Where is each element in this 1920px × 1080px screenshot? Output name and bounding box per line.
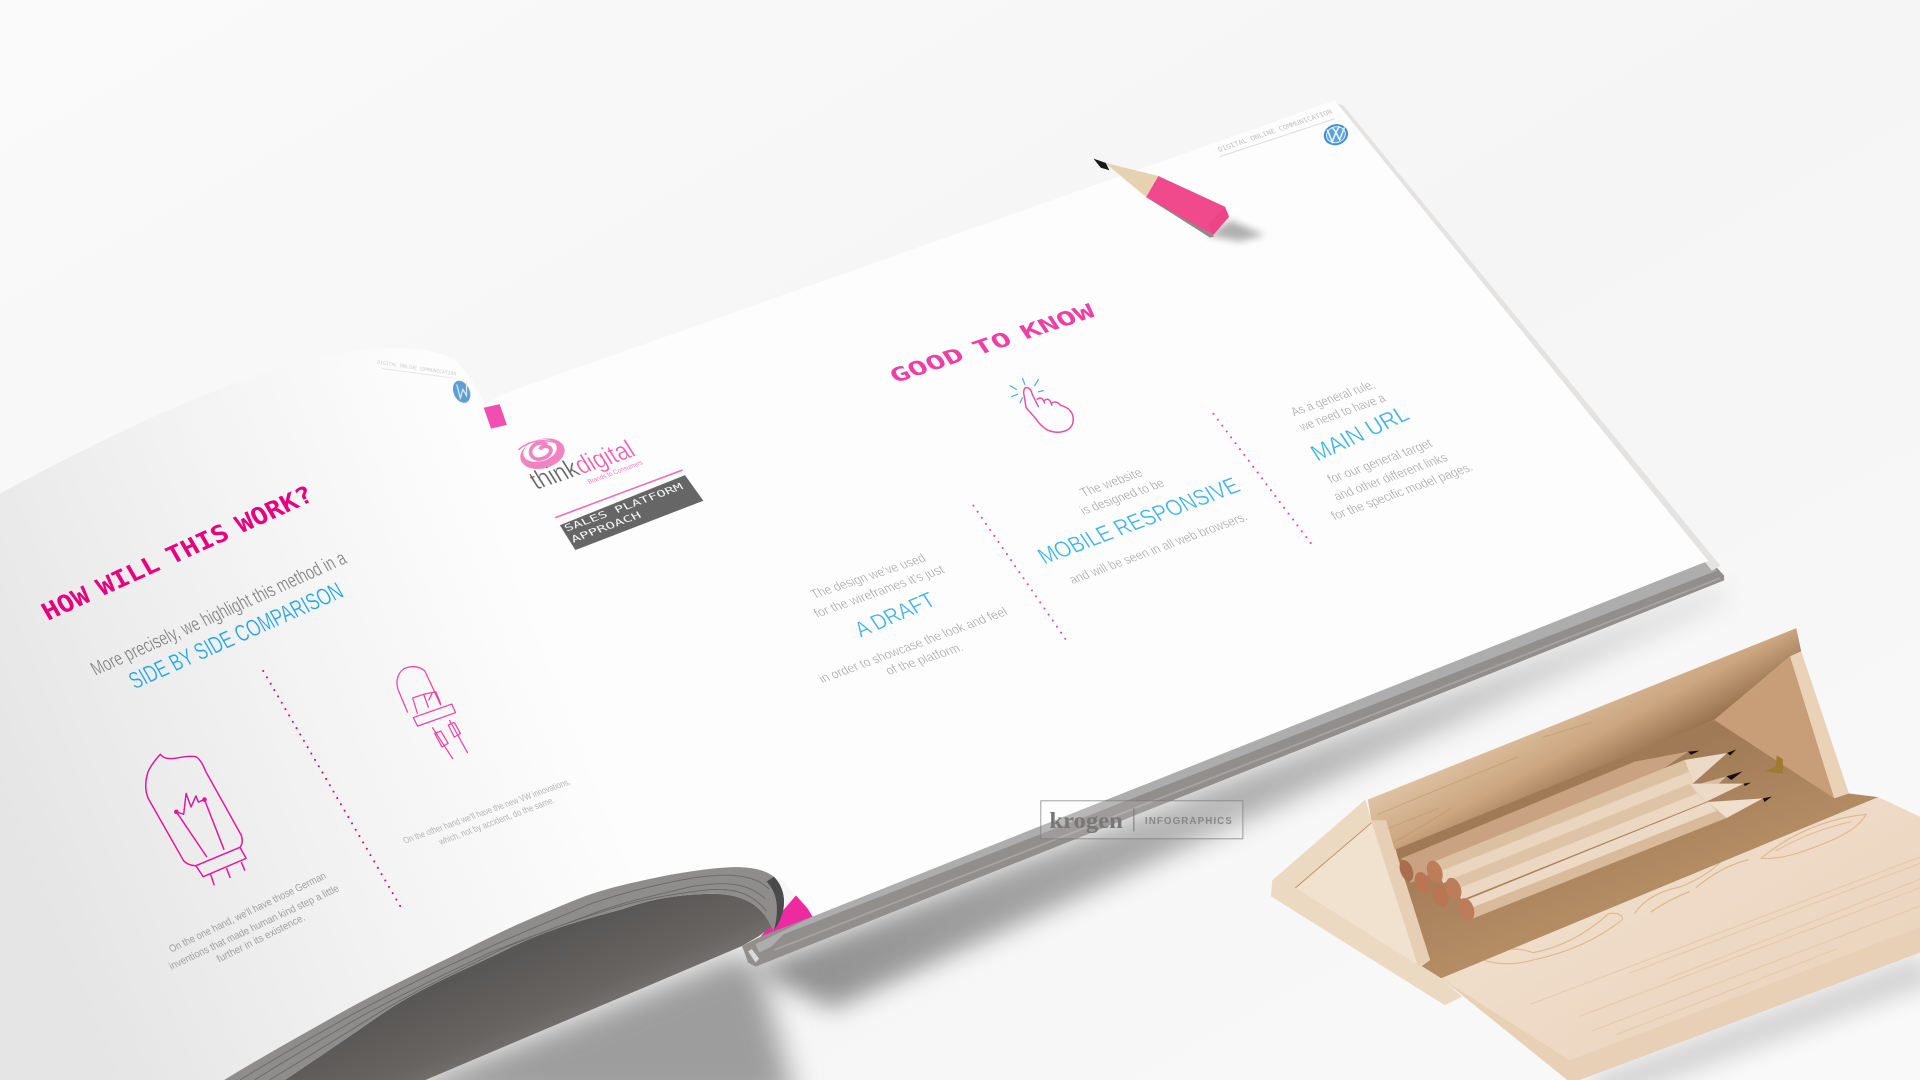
book underside xyxy=(285,894,771,1080)
text block: main url: for our general target xyxy=(1325,437,1435,487)
page header: digital online communication: DIGITAL ONLINE COMMUNICATION xyxy=(377,360,457,377)
text block: main url: for the specific model pages. xyxy=(1329,461,1476,523)
pencil xyxy=(1093,159,1265,241)
text block: mobile responsive: MOBILE RESPONSIVE xyxy=(1032,472,1245,569)
watermark: krogen infographics: krogen xyxy=(1049,808,1123,834)
box right triangle xyxy=(1714,651,1849,798)
box left end xyxy=(1271,800,1462,1005)
text block: a draft: A DRAFT xyxy=(850,588,940,642)
pink bookmark, top xyxy=(484,404,507,429)
text block: main url: and other different links xyxy=(1331,451,1451,504)
watermark: krogen infographics xyxy=(1041,801,1243,839)
text block: mobile responsive: The website xyxy=(1078,466,1146,500)
box lid xyxy=(1441,797,1920,1080)
icon: tapping hand xyxy=(1010,378,1073,432)
divider: dotted line xyxy=(263,671,402,909)
caption: one hand: further in its existence. xyxy=(215,912,307,965)
text block: a draft xyxy=(808,552,1010,686)
title box: sales platform approach: SALES PLATFORM xyxy=(562,481,685,534)
text block: mobile responsive: and will be seen in all web browsers. xyxy=(1067,510,1251,587)
caption: other hand: which, not by accident, do the same. xyxy=(436,796,557,848)
logo: think digital: thinkdigital xyxy=(524,436,640,495)
watermark: krogen infographics: INFOGRAPHICS xyxy=(1145,816,1232,827)
divider: right dotted line xyxy=(1213,414,1314,547)
left page xyxy=(0,348,767,1080)
heading: how will this work: HOW WILL THIS WORK? xyxy=(37,481,319,627)
box back wall xyxy=(1368,628,1801,850)
right page xyxy=(485,100,1720,916)
caption: one hand: On the one hand, we'll have those German xyxy=(167,871,328,955)
text block: main url: we need to have a xyxy=(1296,392,1389,434)
title box: sales platform approach: APPROACH xyxy=(569,510,644,545)
text block: main url: As a general rule, xyxy=(1288,378,1378,419)
intro sentence: More precisely, we highlight this method in a xyxy=(87,548,350,680)
text block: a draft: The design we've used xyxy=(808,552,929,602)
page header: digital online communication xyxy=(377,360,457,378)
book cover spine band xyxy=(742,558,1724,967)
divider: left dotted line xyxy=(973,506,1069,644)
text block: main url xyxy=(1288,378,1476,523)
text block: mobile responsive: is designed to be xyxy=(1078,477,1168,518)
caption: other hand xyxy=(402,777,573,848)
icon: VW logo xyxy=(1321,121,1350,148)
text block: mobile responsive xyxy=(1032,466,1251,587)
pink rule above title box xyxy=(553,470,683,518)
icon: vacuum tube bulb xyxy=(146,754,246,885)
icon: LED xyxy=(397,667,468,759)
heading: good to know: GOOD TO KNOW xyxy=(885,300,1101,388)
book cover shadow xyxy=(404,585,1729,1080)
text block: a draft: for the wireframes it's just xyxy=(811,563,947,621)
wooden pencil box xyxy=(1271,628,1920,1080)
caption: one hand: inventions that made human kind step a little xyxy=(167,883,341,972)
title box: sales platform approach xyxy=(557,475,703,551)
page block xyxy=(224,867,784,1080)
icon: VW logo xyxy=(450,378,474,406)
text block: a draft: in order to showcase the look and feel xyxy=(816,605,1010,686)
pink bookmark, bottom xyxy=(760,893,812,937)
box floor xyxy=(1395,720,1878,978)
highlight: side by side comparison: SIDE BY SIDE COMPARISON xyxy=(124,578,348,694)
pencils in box xyxy=(1397,749,1772,923)
text block: a draft: of the platform. xyxy=(883,641,967,678)
page header: digital online communication: DIGITAL ONLINE COMMUNICATION xyxy=(1216,108,1334,153)
text block: main url: MAIN URL xyxy=(1305,400,1414,466)
caption: other hand: On the other hand we'll have the new VW innovations, xyxy=(402,777,573,846)
logo: think digital: Brands to Consumers xyxy=(586,458,644,486)
